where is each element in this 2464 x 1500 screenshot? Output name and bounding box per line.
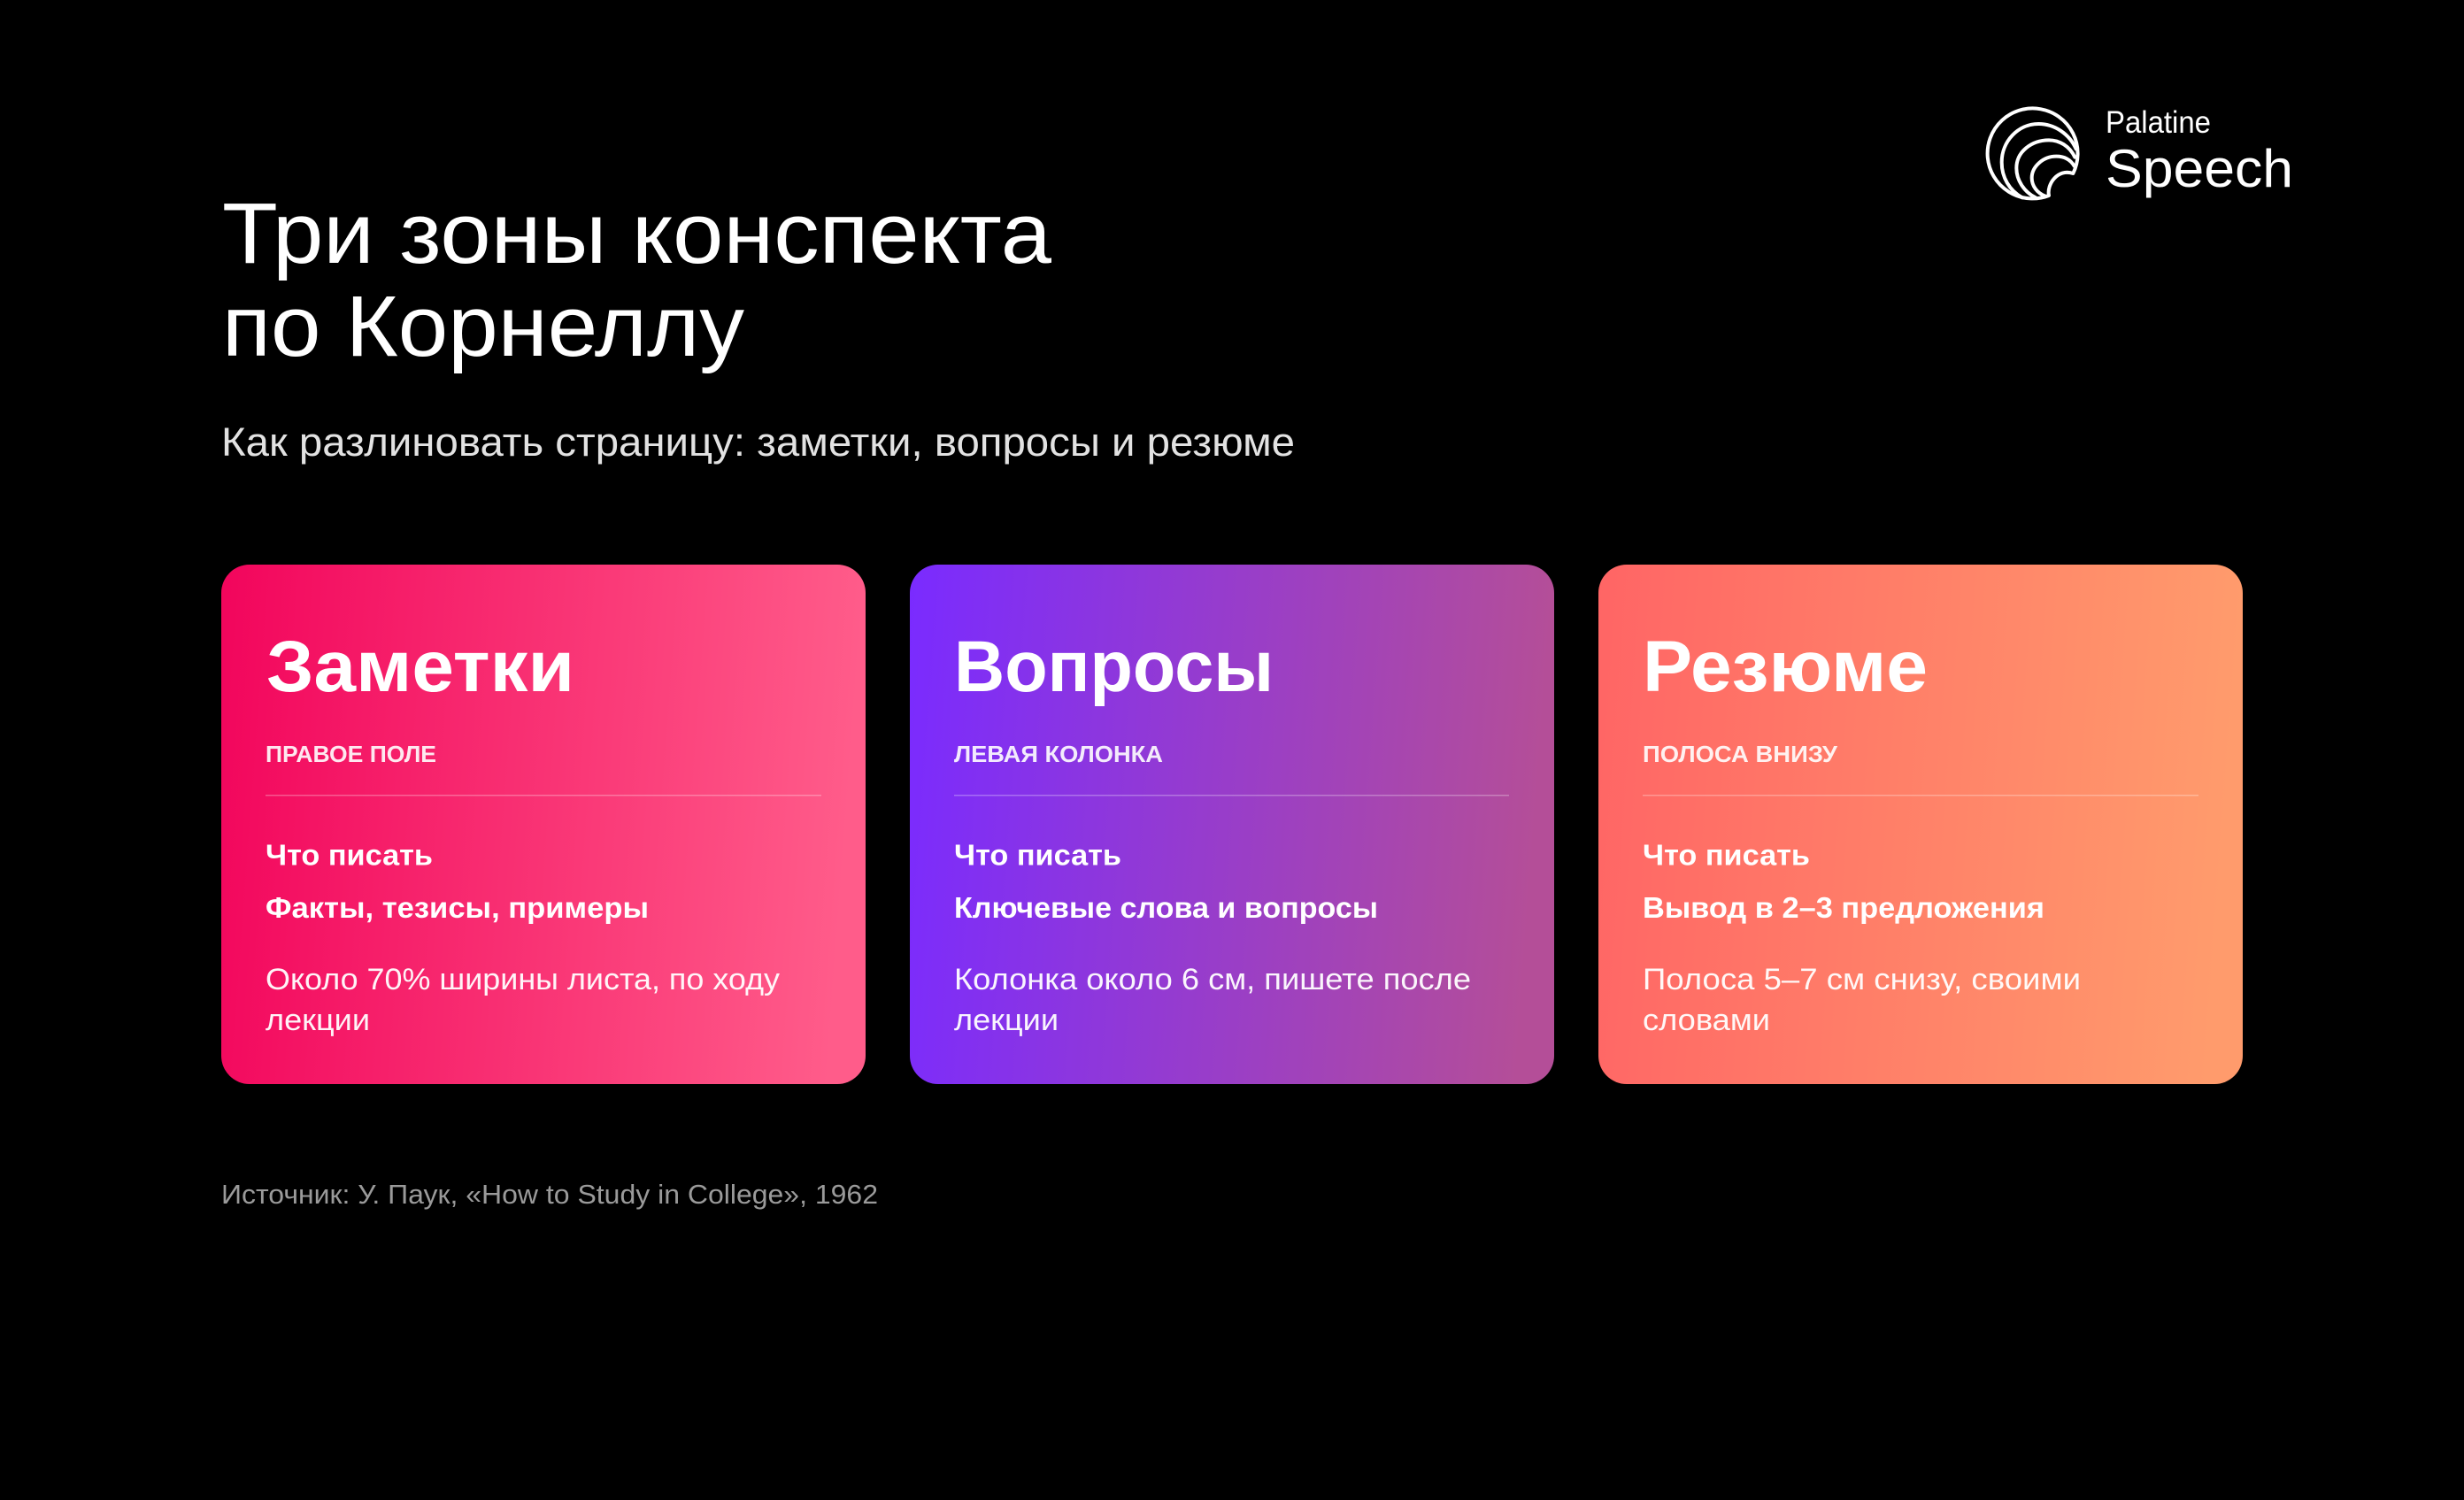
card heading: Резюме [1643, 627, 1928, 707]
card body [1643, 963, 2081, 1037]
card label: Что писать [266, 839, 433, 871]
card body: Около 70% ширины листа, по ходу [266, 963, 780, 996]
card tag: ПОЛОСА ВНИЗУ [1643, 741, 1838, 767]
card body: лекции [954, 1004, 1059, 1037]
logo: Palatine Speech: Speech [2106, 139, 2293, 198]
panel: Заметки [221, 565, 866, 1084]
logo text: Palatine [2106, 105, 2211, 140]
card highlight: Вывод в 2–3 предложения [1643, 891, 2044, 924]
panel: Резюме [1598, 565, 2243, 1084]
card highlight: Ключевые слова и вопросы [954, 891, 1378, 924]
title: Три зоны конспекта [222, 185, 1051, 281]
card label: Что писать [1643, 839, 1810, 871]
card body: Полоса 5–7 см снизу, своими [1643, 963, 2081, 996]
subtitle: Как разлиновать страницу: заметки, вопросы и резюме [221, 419, 1295, 465]
card heading: Вопросы [954, 627, 1274, 707]
title: по Корнеллу [222, 278, 745, 374]
card tag: ПРАВОЕ ПОЛЕ [266, 741, 436, 767]
logo: Palatine Speech [1988, 105, 2293, 198]
card label: Что писать [954, 839, 1121, 871]
card body [954, 963, 1471, 1037]
title [222, 185, 1051, 374]
card body: словами [1643, 1004, 1770, 1037]
card body [266, 963, 780, 1037]
card heading: Заметки [266, 627, 574, 707]
card tag: ЛЕВАЯ КОЛОНКА [954, 741, 1163, 767]
icon: shell mark [1988, 108, 2078, 198]
card highlight: Факты, тезисы, примеры [266, 891, 649, 924]
panel: Вопросы [910, 565, 1554, 1084]
card body: лекции [266, 1004, 370, 1037]
card body: Колонка около 6 см, пишете после [954, 963, 1471, 996]
source note: Источник: У. Паук, «How to Study in College», 1962 [221, 1179, 878, 1210]
